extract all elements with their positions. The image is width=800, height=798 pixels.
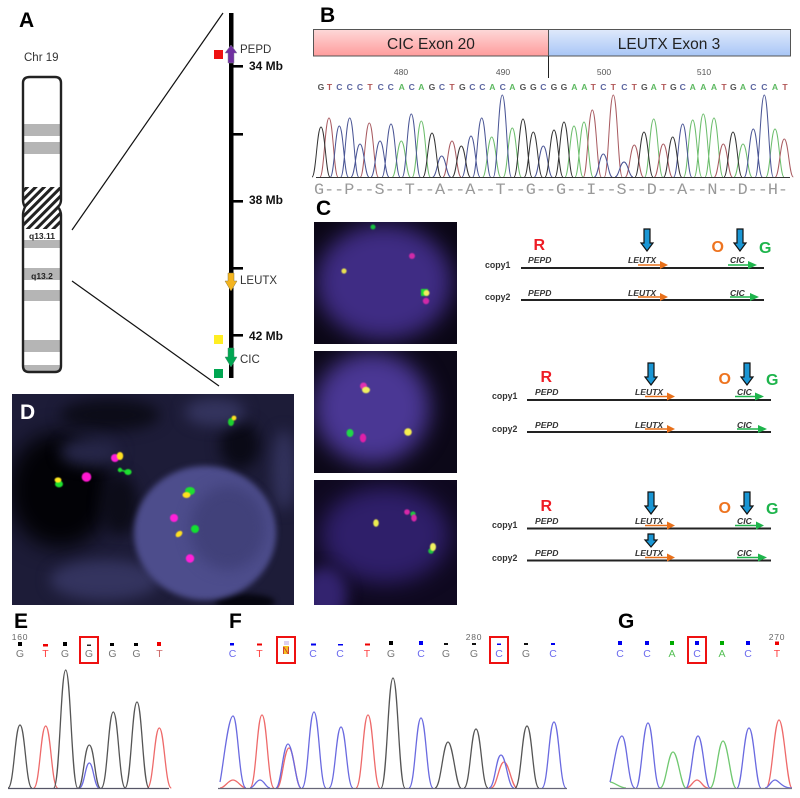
base calls: G <box>522 648 530 660</box>
nucleotide sequence: G <box>318 82 325 92</box>
traces <box>8 670 171 788</box>
panel G: chromatogram <box>610 610 792 788</box>
schematic 2: G <box>766 372 778 389</box>
chromosome ideogram: q13.11 <box>29 231 55 241</box>
base calls: T <box>774 648 781 660</box>
nucleotide sequence: G <box>429 82 436 92</box>
base calls: G <box>61 648 69 660</box>
probe squares <box>214 50 223 378</box>
schematic 3: copy2 <box>492 553 518 563</box>
nucleotide sequence: T <box>661 82 667 92</box>
nucleotide sequence: C <box>378 82 384 92</box>
schematic 1: LEUTX <box>628 255 657 265</box>
schematic 3 <box>492 492 778 563</box>
nucleotide sequence: C <box>600 82 606 92</box>
base calls: G <box>16 648 24 660</box>
nucleotide sequence: C <box>621 82 627 92</box>
chromosome label: Chr 19 <box>24 52 59 64</box>
panel label G: G <box>618 610 634 633</box>
nucleotide sequence: G <box>459 82 466 92</box>
position numbers <box>394 67 711 77</box>
nucleotide sequence: G <box>520 82 527 92</box>
nucleotide sequence: C <box>540 82 546 92</box>
position numbers: 500 <box>597 67 611 77</box>
nucleotide sequence: T <box>721 82 727 92</box>
base calls: C <box>336 648 344 660</box>
schematic 1 <box>485 229 771 302</box>
base calls: T <box>256 648 263 660</box>
nucleotide sequence: A <box>581 82 587 92</box>
nucleotide sequence: T <box>611 82 617 92</box>
schematic 3: PEPD <box>535 548 558 558</box>
schematic 1: copy1 <box>485 260 511 270</box>
base calls <box>616 641 781 660</box>
panel F: chromatogram <box>218 610 567 788</box>
nucleotide sequence: T <box>591 82 597 92</box>
panel A: chromosome 19 ideogram and zoomed map <box>19 9 283 386</box>
chromatogram traces <box>312 95 793 178</box>
schematic 2 <box>492 363 778 434</box>
gene arrow LEUTX: LEUTX <box>240 275 277 287</box>
nucleotide sequence: C <box>500 82 506 92</box>
nucleotide sequence: A <box>489 82 495 92</box>
exon bar LEUTX: LEUTX Exon 3 <box>618 36 720 53</box>
position number: 280 <box>466 632 482 642</box>
base calls: C <box>616 648 624 660</box>
breakpoint line <box>548 56 550 78</box>
schematic 1: PEPD <box>528 288 551 298</box>
base calls: A <box>668 648 676 660</box>
traces <box>610 720 792 788</box>
base calls: G <box>387 648 395 660</box>
exon bar CIC: CIC Exon 20 <box>387 36 475 53</box>
FISH image 1 <box>314 222 457 344</box>
nucleotide sequence: T <box>327 82 333 92</box>
axis labels: 38 Mb <box>249 193 283 207</box>
nucleotide sequence: C <box>439 82 445 92</box>
nucleotide sequence: G <box>641 82 648 92</box>
gene arrow PEPD: PEPD <box>240 44 271 56</box>
schematic 3: PEPD <box>535 516 558 526</box>
base calls: C <box>643 648 651 660</box>
schematic 2: CIC <box>737 387 753 397</box>
highlight boxes <box>277 637 508 663</box>
base calls: G <box>108 648 117 660</box>
schematic 3: O <box>718 500 731 517</box>
schematic 2: copy2 <box>492 424 518 434</box>
schematic 2: LEUTX <box>635 387 664 397</box>
schematic 1: CIC <box>730 288 746 298</box>
amino acid translation: G--P--S--T--A--A--T--G--G--I--S--D--A--N--D--H- <box>314 181 788 199</box>
highlight box <box>80 637 98 663</box>
nucleotide sequence: A <box>399 82 405 92</box>
genomic axis with ticks <box>229 13 243 378</box>
nucleotide sequence: G <box>530 82 537 92</box>
panel C: FISH images and schematics <box>303 197 778 623</box>
nucleotide sequence: C <box>336 82 342 92</box>
panel label F: F <box>229 610 242 633</box>
schematic 1: LEUTX <box>628 288 657 298</box>
nucleotide sequence: T <box>449 82 455 92</box>
nucleotide sequence: G <box>561 82 568 92</box>
base calls: T <box>156 648 163 660</box>
nucleotide sequence: A <box>740 82 746 92</box>
schematic 2: CIC <box>737 420 753 430</box>
zoom lines <box>72 13 223 386</box>
axis labels: 42 Mb <box>249 329 283 343</box>
traces <box>218 678 567 788</box>
base calls: C <box>495 648 503 660</box>
schematic 3: CIC <box>737 548 753 558</box>
nucleotide sequence: C <box>409 82 415 92</box>
base calls: T <box>364 648 371 660</box>
nucleotide sequence: G <box>551 82 558 92</box>
base calls: G <box>132 648 141 660</box>
panel label B: B <box>320 4 335 27</box>
nucleotide sequence: A <box>772 82 778 92</box>
schematic 3: G <box>766 501 778 518</box>
schematic 3: copy1 <box>492 520 518 530</box>
nucleotide sequence: G <box>670 82 677 92</box>
position numbers: 490 <box>496 67 510 77</box>
panel label A: A <box>19 9 34 32</box>
schematic 2: O <box>718 371 731 388</box>
position number: 160 <box>12 632 28 642</box>
base calls: N <box>282 645 290 657</box>
gene arrow CIC <box>225 348 260 367</box>
schematic 1: O <box>712 239 724 256</box>
base calls <box>229 641 557 660</box>
nucleotide sequence: C <box>680 82 686 92</box>
schematic 2: copy1 <box>492 391 518 401</box>
FISH image 2 <box>314 351 457 473</box>
schematic 1: R <box>534 237 546 254</box>
nucleotide sequence: T <box>632 82 638 92</box>
schematic 3: LEUTX <box>635 516 664 526</box>
nucleotide sequence: C <box>357 82 363 92</box>
schematic 3: CIC <box>737 516 753 526</box>
base calls: C <box>229 648 237 660</box>
nucleotide sequence: A <box>509 82 515 92</box>
schematic 1: CIC <box>730 255 746 265</box>
schematic 2: PEPD <box>535 420 558 430</box>
base calls: G <box>85 648 93 660</box>
nucleotide sequence: A <box>651 82 657 92</box>
FISH photograph D <box>8 394 296 610</box>
nucleotide sequence: G <box>730 82 737 92</box>
axis labels <box>249 59 283 343</box>
base calls: C <box>309 648 317 660</box>
position number: 270 <box>769 632 785 642</box>
base calls: T <box>42 648 49 660</box>
schematic 2: LEUTX <box>635 420 664 430</box>
FISH image 3 <box>314 480 457 605</box>
exon bar LEUTX <box>548 30 790 56</box>
schematic 2: R <box>540 369 552 386</box>
schematic 1: G <box>759 240 771 257</box>
position numbers: 480 <box>394 67 408 77</box>
nucleotide sequence: A <box>418 82 424 92</box>
base calls: G <box>442 648 450 660</box>
highlight box <box>688 637 706 663</box>
nucleotide sequence: A <box>711 82 717 92</box>
base calls: C <box>693 648 701 660</box>
axis labels: 34 Mb <box>249 59 283 73</box>
nucleotide sequence: A <box>571 82 577 92</box>
schematic 1: copy2 <box>485 292 511 302</box>
panel label C: C <box>316 197 331 220</box>
base calls: C <box>744 648 752 660</box>
schematic 1: PEPD <box>528 255 551 265</box>
schematic 3: R <box>540 498 552 515</box>
panel D: FISH image <box>8 394 296 610</box>
panel label E: E <box>14 610 28 633</box>
base calls: C <box>549 648 557 660</box>
nucleotide sequence: A <box>690 82 696 92</box>
nucleotide sequence: A <box>700 82 706 92</box>
position numbers: 510 <box>697 67 711 77</box>
nucleotide sequence: T <box>367 82 373 92</box>
nucleotide sequence: C <box>388 82 394 92</box>
base calls: C <box>417 648 425 660</box>
panel label D: D <box>20 401 35 424</box>
chromosome ideogram <box>20 75 64 375</box>
panel E: chromatogram <box>8 610 171 788</box>
base calls: G <box>470 648 478 660</box>
schematic 2: PEPD <box>535 387 558 397</box>
base calls: A <box>718 648 726 660</box>
panel B: fusion sequence chromatogram <box>312 4 793 199</box>
nucleotide sequence: C <box>761 82 767 92</box>
schematic 3: LEUTX <box>635 548 664 558</box>
nucleotide sequence: C <box>479 82 485 92</box>
base calls <box>16 642 163 660</box>
nucleotide sequence: C <box>347 82 353 92</box>
gene arrow LEUTX <box>225 273 277 291</box>
nucleotide sequence: C <box>469 82 475 92</box>
gene arrow PEPD <box>225 44 271 63</box>
exon bar CIC <box>314 30 548 56</box>
chromosome ideogram: q13.2 <box>31 271 53 281</box>
nucleotide sequence: T <box>782 82 788 92</box>
gene arrow CIC: CIC <box>240 354 260 366</box>
nucleotide sequence: C <box>750 82 756 92</box>
